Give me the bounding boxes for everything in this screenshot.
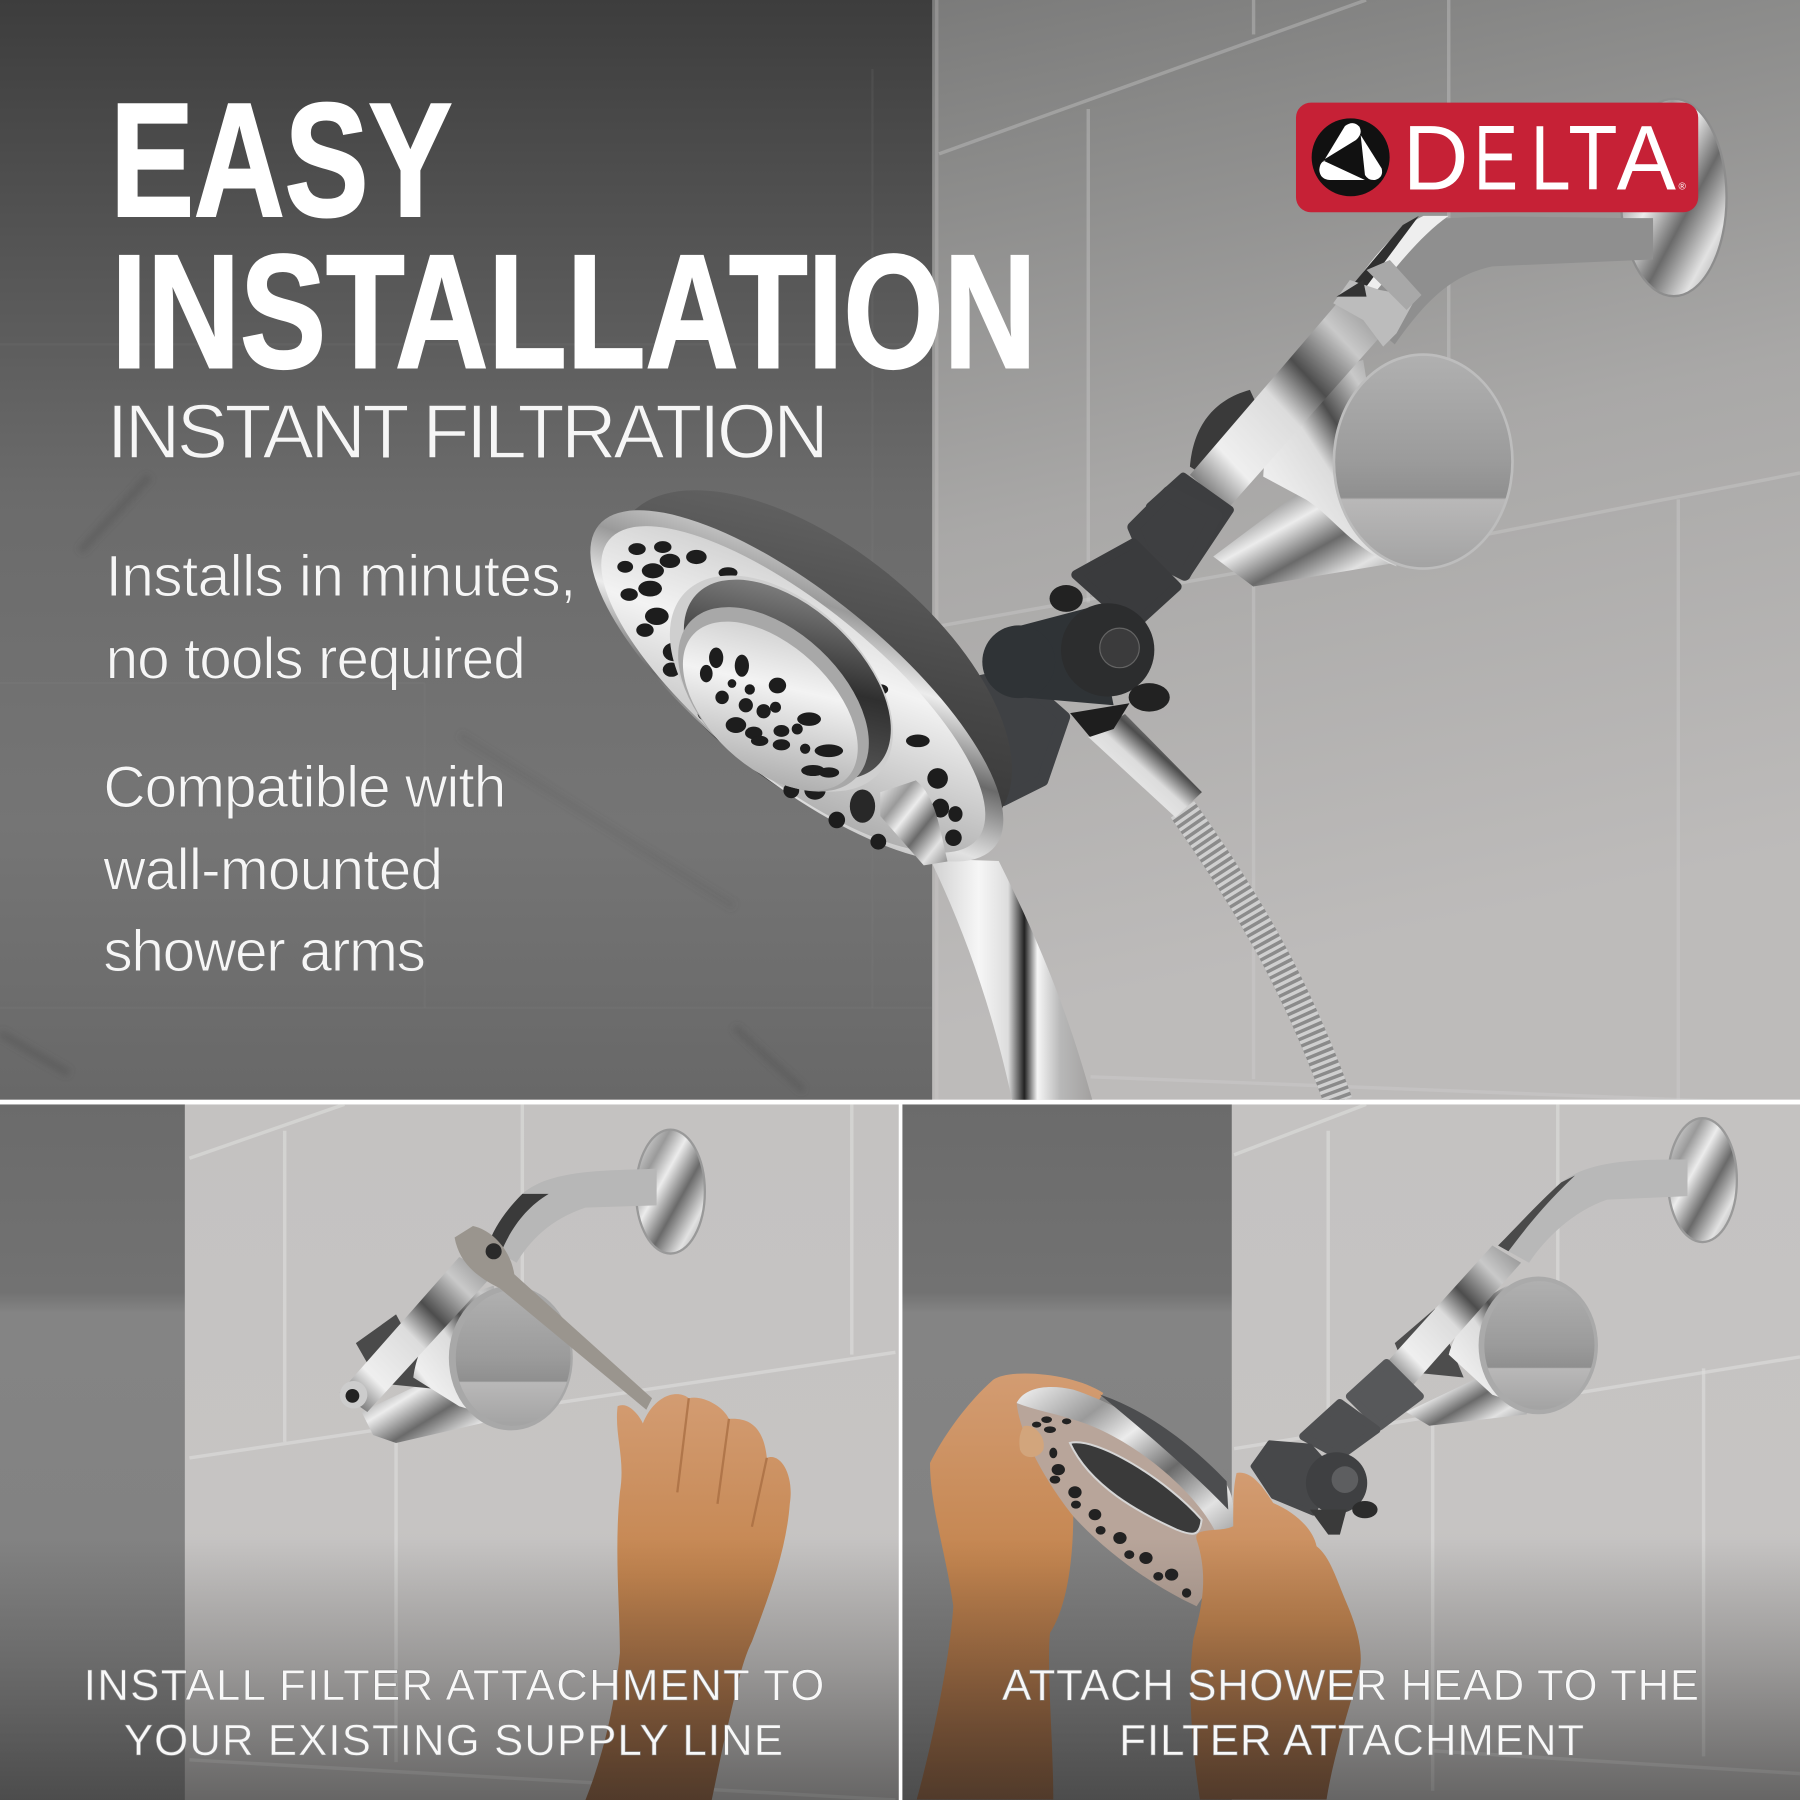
logo wordmark: L	[1531, 107, 1571, 209]
caption: step 1: INSTALL FILTER ATTACHMENT TO	[84, 1662, 824, 1710]
caption: step 2: FILTER ATTACHMENT	[1119, 1717, 1584, 1765]
dark column	[0, 1104, 185, 1800]
caption: step 2: ATTACH SHOWER HEAD TO THE	[1002, 1662, 1699, 1710]
registered mark: ®	[1679, 181, 1687, 192]
icon: hand shower handle	[930, 859, 1093, 1102]
icon: dark swivel mount	[980, 486, 1192, 806]
panel: step 1 photo	[0, 1104, 899, 1800]
icon: flexible hose	[1182, 809, 1339, 1102]
text block: compatibility: wall-mounted	[102, 838, 443, 903]
back shell	[634, 490, 1004, 808]
logo: Delta badge	[1296, 103, 1698, 212]
center spray ring	[670, 576, 893, 792]
title line 1: EASY	[110, 70, 452, 251]
icon: shower arm	[1498, 1118, 1737, 1263]
dark column	[902, 1104, 1232, 1800]
ring nozzles	[617, 541, 963, 850]
logo wordmark: A	[1617, 107, 1677, 209]
icon: shower head	[590, 490, 1004, 866]
icon: dark swivel mount	[1253, 1363, 1420, 1535]
title line 2: INSTALLATION	[111, 221, 1037, 402]
text block: compatibility: Compatible with	[103, 755, 506, 820]
text block: installs in minutes: no tools required	[106, 626, 526, 691]
chrome rim	[590, 510, 1004, 862]
face plate	[601, 526, 986, 852]
icon: delta triangle mark	[1312, 118, 1390, 196]
text block: compatibility: shower arms	[103, 919, 426, 984]
center nozzles	[700, 648, 843, 778]
text block: installs in minutes	[106, 544, 576, 691]
caption: step 1: YOUR EXISTING SUPPLY LINE	[124, 1717, 783, 1765]
panel: step 2 photo	[902, 1104, 1800, 1800]
logo wordmark: T	[1568, 107, 1618, 209]
logo background	[1296, 103, 1698, 212]
caption: step 1	[84, 1662, 824, 1765]
icon: filter attachment	[1150, 260, 1514, 587]
panel: hero photo of installed shower head	[0, 0, 1800, 1104]
icon: left hand	[917, 1373, 1103, 1800]
tile wall	[184, 1104, 899, 1800]
caption: step 2	[1002, 1662, 1699, 1765]
subtitle: INSTANT FILTRATION	[107, 389, 829, 475]
icon: wrench	[455, 1226, 652, 1410]
diverter slot and handle joint	[850, 790, 875, 823]
logo wordmark	[1403, 107, 1677, 209]
bottom fade	[0, 1538, 899, 1800]
text block: installs in minutes: Installs in minutes,	[106, 544, 576, 609]
icon: hand	[585, 1394, 791, 1800]
icon: filter attachment	[1383, 1246, 1598, 1426]
tile wall	[0, 0, 1800, 1100]
tile wall	[1231, 1104, 1800, 1800]
icon: shower arm and escutcheon	[1343, 99, 1727, 344]
marble veins	[0, 476, 804, 1091]
title	[110, 70, 1037, 402]
icon: right hand	[1191, 1473, 1361, 1800]
icon: shower head held in hands	[1017, 1387, 1235, 1606]
bottom fade	[902, 1538, 1800, 1800]
icon: filter attachment	[340, 1257, 573, 1443]
icon: shower arm	[488, 1130, 705, 1263]
logo wordmark: D	[1403, 107, 1469, 209]
icon: hose connector	[1088, 714, 1202, 817]
dark overlay panel	[0, 0, 932, 1100]
logo wordmark: E	[1474, 107, 1518, 209]
text block: compatibility	[102, 755, 506, 984]
